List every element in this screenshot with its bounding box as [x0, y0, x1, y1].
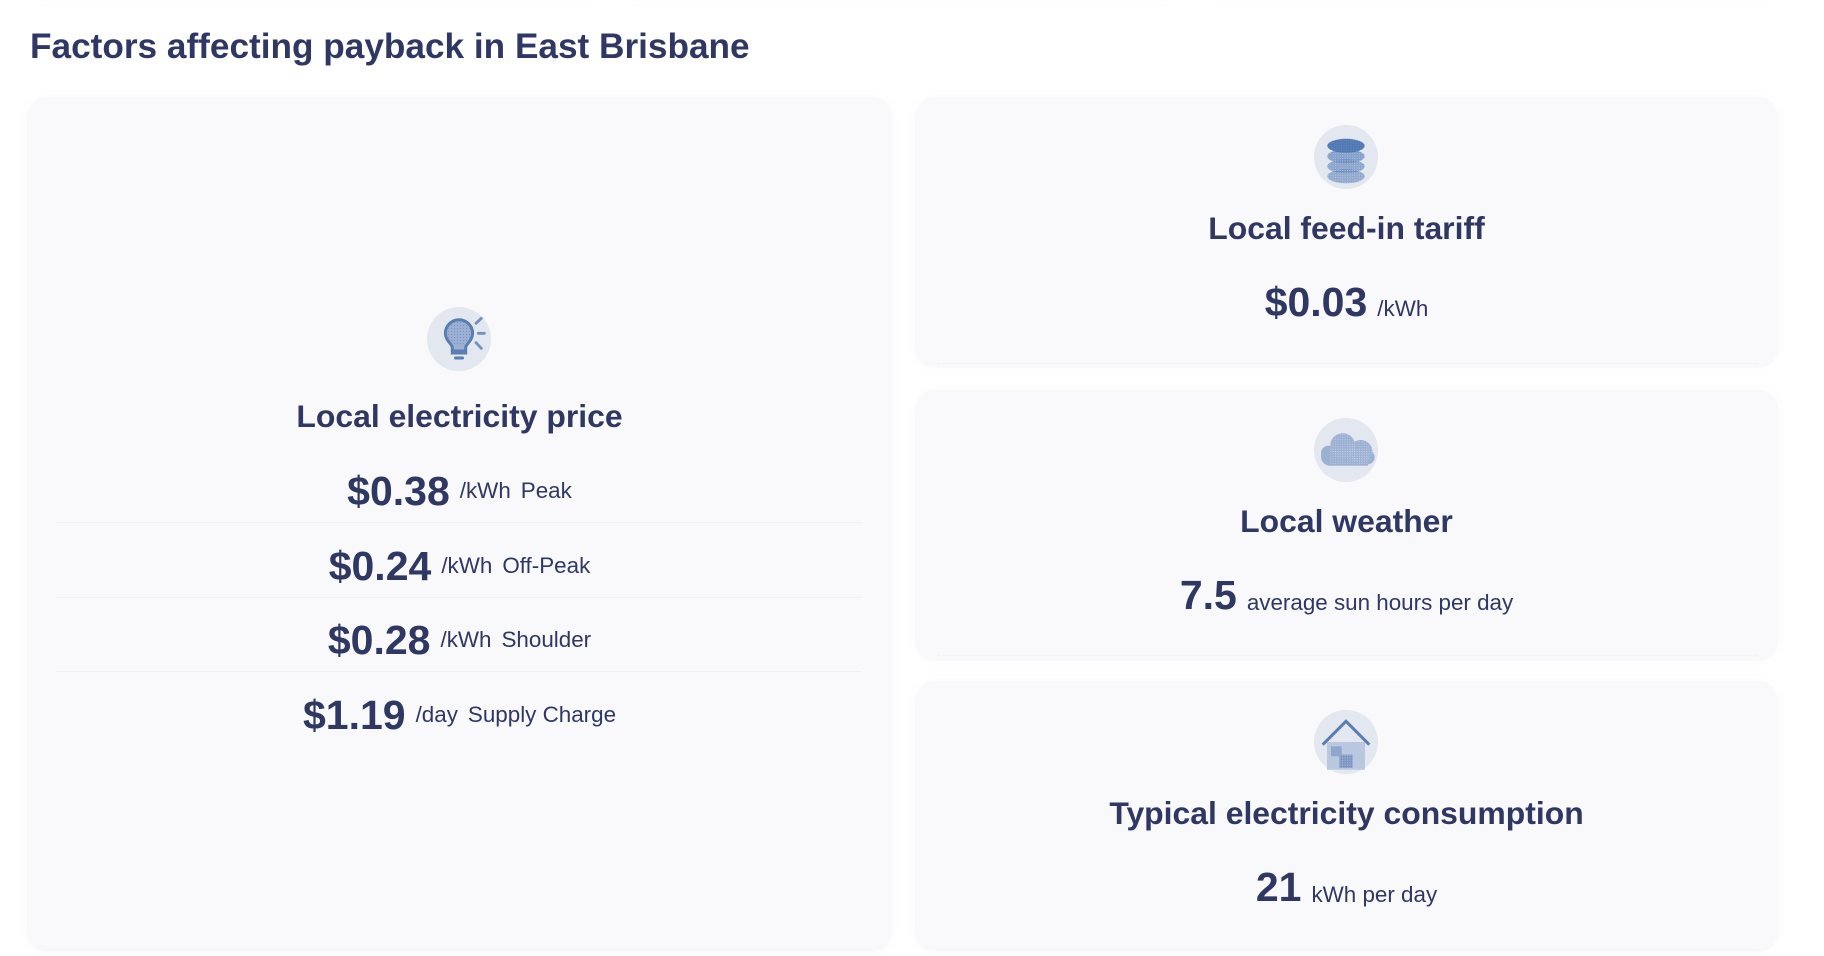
panel: local feed-in tariff: [915, 97, 1778, 368]
heading: local electricity price: Local electricity price: [296, 398, 623, 434]
panel: typical electricity consumption: [915, 681, 1778, 952]
previous section card bottoms: [0, 0, 1824, 1]
value: sun hours: 7.5: [1180, 572, 1237, 618]
price row: off-peak: $0.24: [329, 543, 431, 589]
price row: peak: [347, 468, 572, 514]
value: sun hours: [1180, 572, 1514, 618]
heading: local feed-in tariff: Local feed-in tariff: [1208, 210, 1485, 246]
price row: shoulder: $0.28: [328, 617, 430, 663]
icon: light bulb: [427, 307, 491, 371]
price row: supply charge: [303, 692, 616, 738]
price row: peak: $0.38: [347, 468, 450, 514]
price row: shoulder: Shoulder: [501, 627, 591, 652]
price row: supply charge: Supply Charge: [468, 702, 616, 727]
price row: off-peak: Off-Peak: [502, 553, 590, 578]
value: consumption: kWh per day: [1311, 882, 1437, 907]
price row: off-peak: /kWh: [441, 553, 492, 578]
panel: local electricity price: [27, 97, 892, 952]
icon: cloud: [1314, 418, 1378, 482]
price row: off-peak: [329, 543, 590, 589]
heading: typical electricity consumption: Typical electricity consumption: [1109, 795, 1584, 831]
icon: coins: [1314, 125, 1378, 189]
price row: supply charge: /day: [416, 702, 458, 727]
value: consumption: 21: [1256, 864, 1301, 910]
price row: peak: /kWh: [460, 478, 511, 503]
title: Factors affecting payback in East Brisbane: [30, 27, 750, 66]
value: feed-in tariff: [1265, 279, 1428, 325]
value: feed-in tariff: $0.03: [1265, 279, 1367, 325]
price row: peak: Peak: [521, 478, 572, 503]
price row: shoulder: [328, 617, 591, 663]
panel: local weather: [915, 390, 1778, 661]
value: sun hours: average sun hours per day: [1247, 590, 1513, 615]
heading: local weather: Local weather: [1240, 503, 1453, 539]
price row: supply charge: $1.19: [303, 692, 406, 738]
price row: shoulder: /kWh: [440, 627, 491, 652]
icon: house: [1314, 710, 1378, 774]
value: feed-in tariff: /kWh: [1377, 296, 1428, 321]
value: consumption: [1256, 864, 1438, 910]
